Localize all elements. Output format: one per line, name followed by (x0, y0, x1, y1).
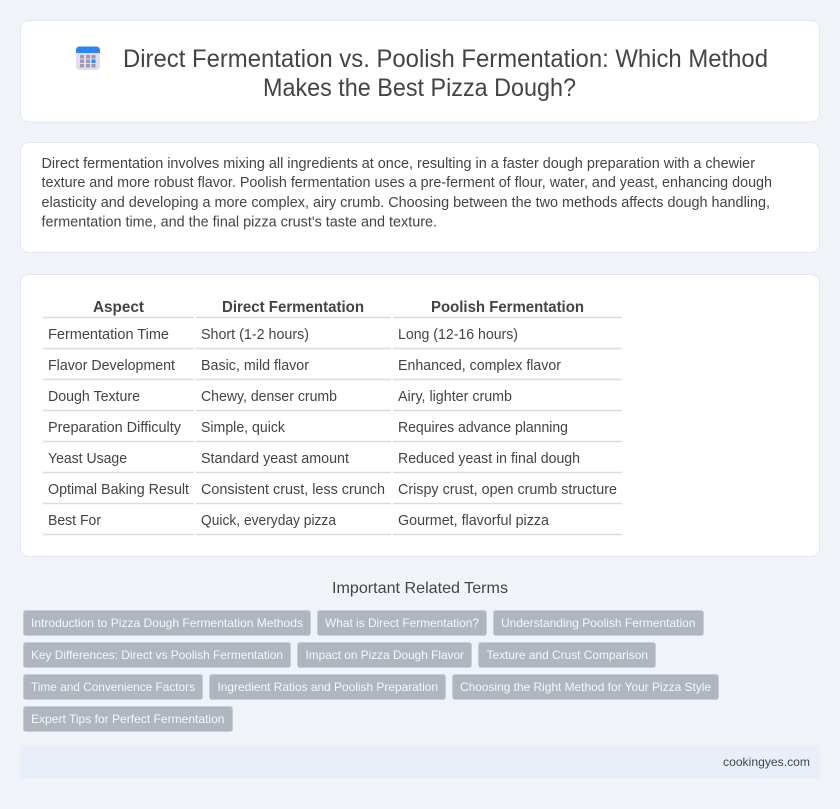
icon: calendar (76, 46, 100, 70)
row: optimal baking result: Consistent crust, less crunch (201, 482, 385, 498)
row: flavor development: Flavor Development (48, 358, 175, 374)
row: yeast usage: Yeast Usage (48, 451, 127, 467)
title: Makes the Best Pizza Dough? (263, 74, 576, 102)
table header: Poolish Fermentation (431, 299, 584, 316)
tag: Time and Convenience Factors (31, 680, 195, 694)
row: optimal baking result (43, 482, 622, 504)
tag (494, 610, 704, 636)
tag: Ingredient Ratios and Poolish Preparation (218, 680, 438, 694)
row: dough texture (43, 389, 622, 410)
row: dough texture: Chewy, denser crumb (201, 389, 337, 405)
row: best for (43, 513, 622, 534)
row: best for: Best For (48, 513, 101, 529)
tag: Key Differences: Direct vs Poolish Fermentation (31, 648, 283, 662)
row: fermentation time: Short (1-2 hours) (201, 327, 309, 343)
footer (20, 745, 820, 779)
panel: description (20, 142, 820, 252)
row: preparation difficulty: Requires advance planning (398, 420, 568, 436)
table header (43, 299, 622, 318)
tag: Expert Tips for Perfect Fermentation (31, 712, 224, 726)
row: dough texture: Airy, lighter crumb (398, 389, 512, 405)
title: Direct Fermentation vs. Poolish Fermentation: Which Method (123, 45, 768, 73)
panel: comparison table (20, 274, 820, 556)
panel: header (20, 20, 820, 122)
related terms tags (24, 610, 718, 732)
row: best for: Quick, everyday pizza (201, 513, 336, 529)
tag: Introduction to Pizza Dough Fermentation Methods (31, 616, 303, 630)
tag (478, 642, 656, 668)
heading: related terms: Important Related Terms (332, 580, 508, 597)
tag (298, 642, 472, 668)
row: optimal baking result: Optimal Baking Result (48, 482, 189, 498)
text block: description: fermentation time, and the final pizza crust's taste and texture. (42, 214, 437, 230)
tag: Choosing the Right Method for Your Pizza Style (460, 680, 711, 694)
row: dough texture: Dough Texture (48, 389, 140, 405)
tag (452, 674, 718, 700)
row: flavor development: Enhanced, complex flavor (398, 358, 561, 374)
row: preparation difficulty: Simple, quick (201, 420, 286, 436)
tag (24, 610, 310, 636)
row: fermentation time: Long (12-16 hours) (398, 327, 518, 343)
table header: Direct Fermentation (222, 299, 364, 316)
table header: Aspect (93, 299, 145, 316)
tag: Impact on Pizza Dough Flavor (306, 648, 464, 662)
row: fermentation time (43, 327, 622, 348)
title (123, 45, 768, 102)
row: preparation difficulty: Preparation Difficulty (48, 420, 182, 436)
row: yeast usage (43, 451, 622, 472)
text block: description: texture and more robust flavor. Poolish fermentation uses a pre-ferment of flour, water, and yeast, enhancing dough (42, 175, 772, 191)
text block: description: elasticity and developing a more complex, airy crumb. Choosing between the two methods affects dough handling, (42, 195, 770, 211)
tag (318, 610, 486, 636)
row: flavor development: Basic, mild flavor (201, 358, 309, 374)
text block: description (42, 156, 772, 230)
row: fermentation time: Fermentation Time (48, 327, 169, 343)
tag (24, 706, 232, 732)
tag (210, 674, 446, 700)
tag: Understanding Poolish Fermentation (501, 616, 696, 630)
row: flavor development (43, 358, 622, 380)
row: optimal baking result: Crispy crust, open crumb structure (398, 482, 617, 498)
row: yeast usage: Reduced yeast in final dough (398, 451, 580, 467)
tag: Texture and Crust Comparison (486, 648, 648, 662)
row: yeast usage: Standard yeast amount (201, 451, 349, 467)
tag: What is Direct Fermentation? (325, 616, 479, 630)
footer: cookingyes.com (723, 755, 810, 769)
tag (24, 642, 290, 668)
tag (24, 674, 202, 700)
row: best for: Gourmet, flavorful pizza (398, 513, 549, 529)
text block: description: Direct fermentation involves mixing all ingredients at once, resulting in a faster dough preparation with a chewier (42, 156, 755, 172)
row: preparation difficulty (43, 420, 622, 442)
